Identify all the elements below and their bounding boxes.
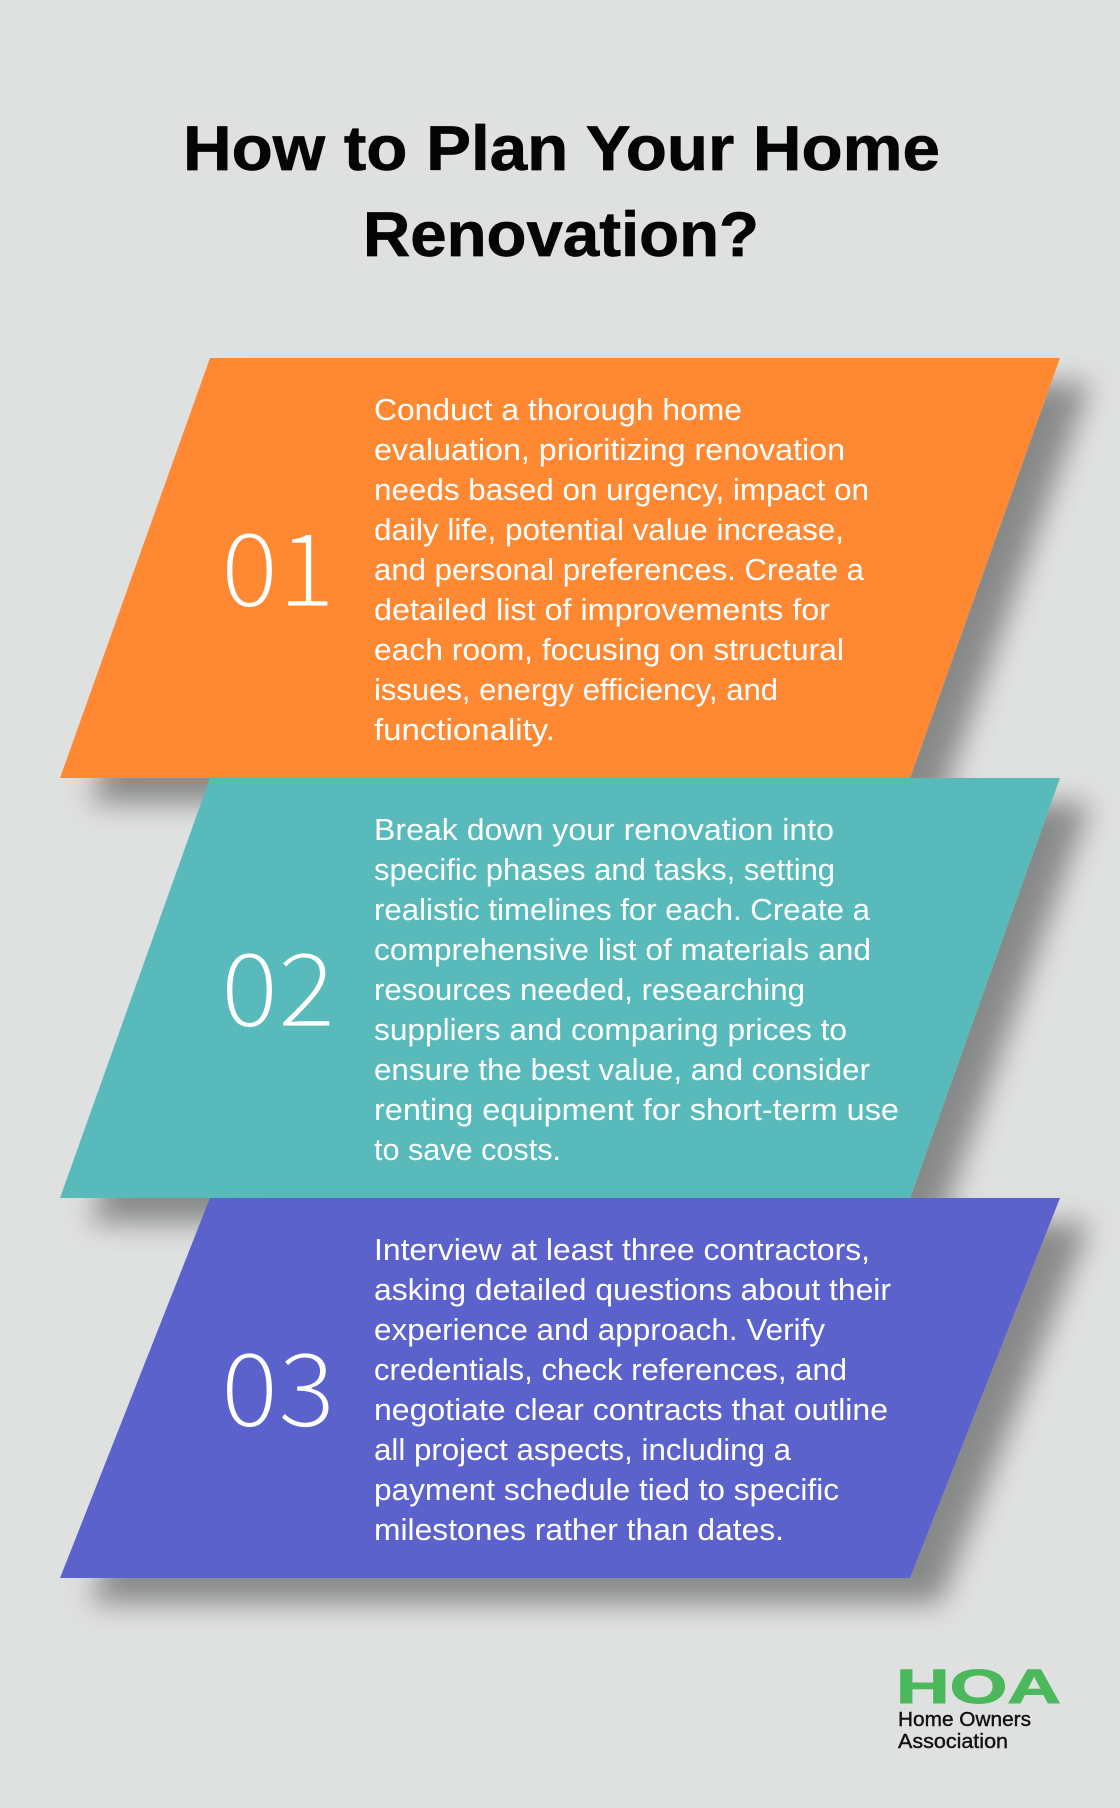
logo tagline: Home Owners: [898, 1708, 1031, 1731]
step 01 text: issues, energy efficiency, and: [374, 673, 778, 707]
title: Renovation?: [363, 200, 759, 270]
step 03 text: milestones rather than dates.: [374, 1513, 784, 1547]
title: How to Plan Your Home: [183, 114, 940, 184]
step 01 text: evaluation, prioritizing renovation: [374, 433, 845, 467]
step 03 text: [374, 1233, 891, 1547]
logo: HOA Home Owners Association: [896, 1661, 1061, 1753]
step 01 text: functionality.: [374, 713, 555, 747]
step 02 text: to save costs.: [374, 1133, 561, 1167]
title: [183, 114, 940, 270]
step 03 text: asking detailed questions about their: [374, 1273, 891, 1307]
step 03 text: payment schedule tied to specific: [374, 1473, 839, 1507]
step 01 text: detailed list of improvements for: [374, 593, 830, 627]
number 03: 03: [221, 1310, 335, 1456]
step 02 text: comprehensive list of materials and: [374, 933, 871, 967]
step 02 text: Break down your renovation into: [374, 813, 834, 847]
step 03 text: all project aspects, including a: [374, 1433, 791, 1467]
panel: step 02: [60, 778, 1060, 1198]
logo tagline: [898, 1708, 1031, 1753]
step 02 text: suppliers and comparing prices to: [374, 1013, 847, 1047]
step 03 text: credentials, check references, and: [374, 1353, 847, 1387]
step 02 text: specific phases and tasks, setting: [374, 853, 835, 887]
step 01 text: daily life, potential value increase,: [374, 513, 844, 547]
step 03 text: negotiate clear contracts that outline: [374, 1393, 888, 1427]
number 02: 02: [221, 910, 335, 1056]
step 03 text: experience and approach. Verify: [374, 1313, 826, 1347]
step 02 text: [374, 813, 899, 1167]
logo tagline: Association: [898, 1730, 1008, 1753]
purple parallelogram: [60, 1198, 1060, 1578]
step 01 text: and personal preferences. Create a: [374, 553, 864, 587]
number 01: 01: [221, 490, 335, 636]
panel: step 01: [60, 358, 1060, 778]
step 01 text: each room, focusing on structural: [374, 633, 844, 667]
step 01 text: [374, 393, 869, 747]
step 02 text: resources needed, researching: [374, 973, 805, 1007]
logo wordmark: HOA: [896, 1661, 1061, 1714]
step 03 text: Interview at least three contractors,: [374, 1233, 870, 1267]
step 02 text: renting equipment for short-term use: [374, 1093, 899, 1127]
step 02 text: realistic timelines for each. Create a: [374, 893, 870, 927]
step 01 text: needs based on urgency, impact on: [374, 473, 869, 507]
teal parallelogram: [60, 778, 1060, 1198]
panel: step 03: [60, 1198, 1060, 1578]
step 02 text: ensure the best value, and consider: [374, 1053, 870, 1087]
orange parallelogram: [60, 358, 1060, 778]
step 01 text: Conduct a thorough home: [374, 393, 742, 427]
